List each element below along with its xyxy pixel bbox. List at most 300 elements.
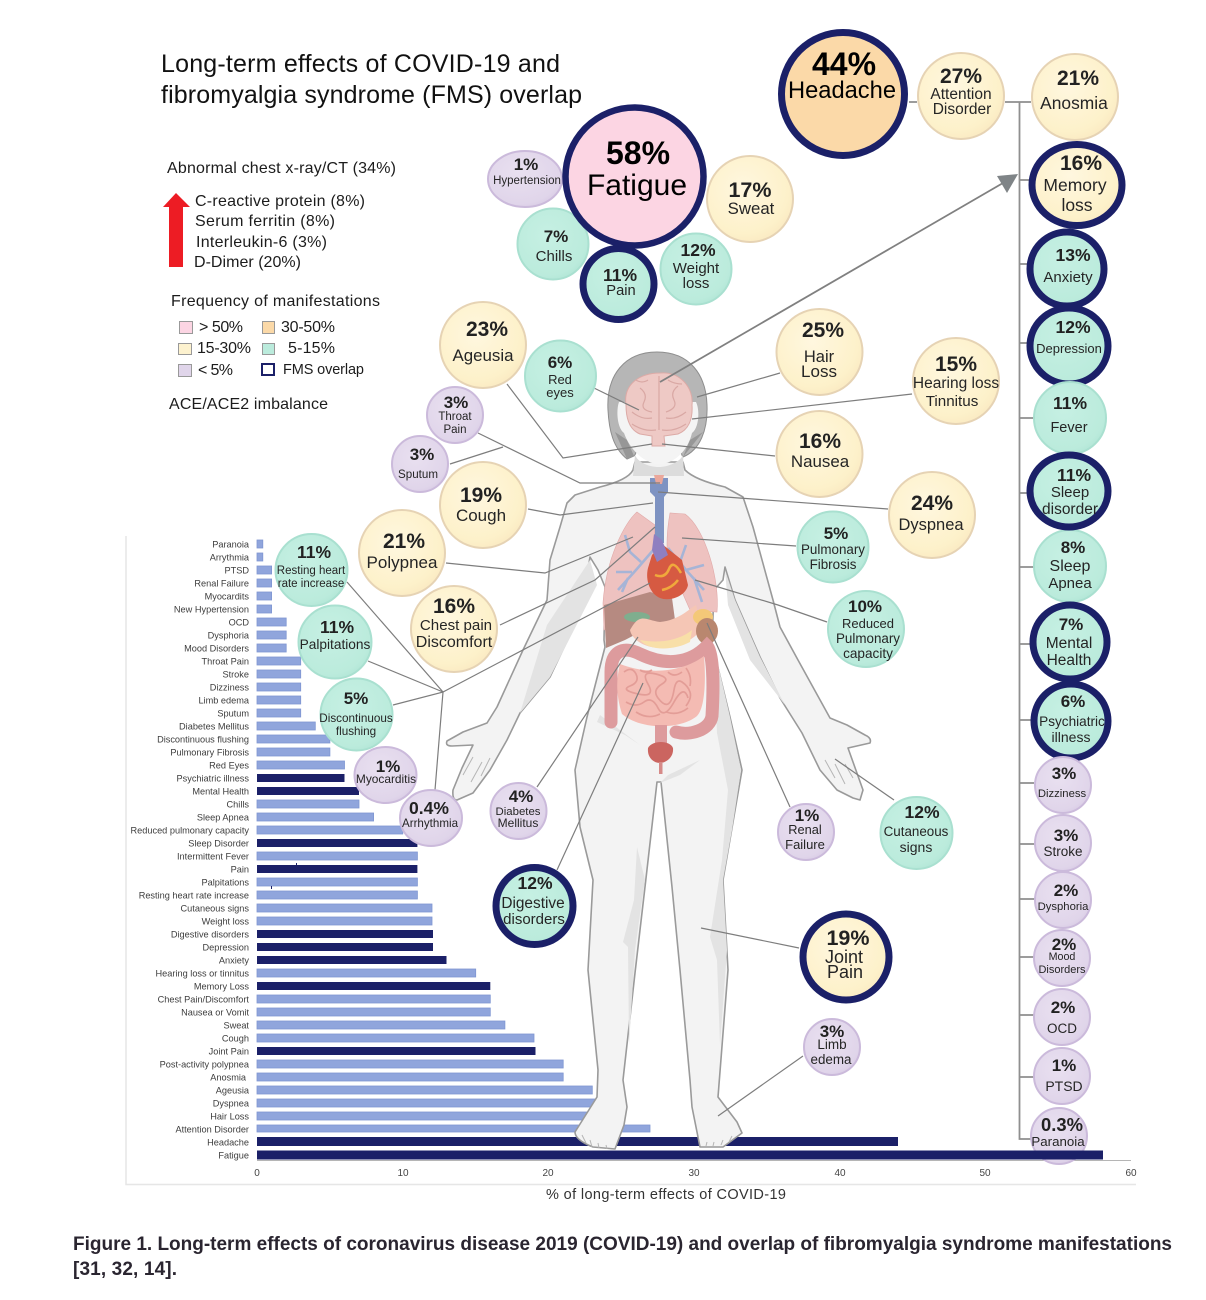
bubble: Resting heart rate increase 11%: Resting heart [277, 565, 346, 577]
bubble: Sleep Apnea 8%: Apnea [1048, 575, 1092, 592]
bubble: Diabetes Mellitus 4%: 4% [509, 787, 533, 806]
bar: Dizziness: Dizziness [210, 682, 249, 692]
bar: Joint Pain: Joint Pain [209, 1046, 249, 1056]
bubble: Renal Failure 1%: Renal [788, 822, 822, 837]
bar: Anosmia [210, 1072, 563, 1082]
bubble: PTSD 1%: PTSD [1045, 1078, 1083, 1094]
bubble: Sleep disorder 11% (FMS overlap) [1030, 455, 1108, 527]
bubble: Renal Failure 1% [778, 804, 834, 860]
bar: Anxiety: Anxiety [219, 956, 249, 966]
bar: Hearing loss or tinnitus [156, 968, 476, 978]
bubble: Throat Pain 3%: Throat [438, 411, 472, 423]
bar: Dizziness [210, 682, 301, 692]
bar: Myocardits: Myocardits [205, 592, 249, 602]
bar: Cutaneous signs [181, 904, 432, 914]
bubble: Diabetes Mellitus 4%: Diabetes [496, 806, 541, 818]
bubble: Fatigue 58% (FMS overlap) [566, 108, 704, 246]
bar: Weight loss [202, 916, 432, 926]
bubble: Ageusia 23%: Ageusia [452, 346, 514, 365]
body shading [520, 560, 785, 1045]
bar: Digestive disorders: Digestive disorders [171, 930, 249, 940]
bubble: Digestive disorders 12% (FMS overlap): 12% [517, 873, 553, 893]
x axis tick labels: 50 [979, 1168, 991, 1179]
bar: Attention Disorder: Attention Disorder [175, 1124, 249, 1134]
bladder [648, 725, 673, 774]
bar: PTSD: PTSD [224, 566, 249, 576]
bubble: Sleep Apnea 8%: 8% [1061, 538, 1085, 557]
bubble: Mood Disorders 2%: 2% [1052, 935, 1076, 954]
bubble: Hair Loss 25%: Hair [804, 348, 835, 366]
bar: Mood Disorders [184, 644, 286, 654]
bubble: Hair Loss 25%: 25% [802, 319, 844, 342]
bar: Pain: Pain [231, 864, 249, 874]
bubble: Reduced Pulmonary capacity 10%: Reduced [842, 616, 894, 631]
bar: Depression [203, 942, 433, 952]
bar: Nausea or Vomit: Nausea or Vomit [181, 1008, 249, 1018]
bar: Cough: Cough [222, 1034, 249, 1044]
bar: Hair Loss: Hair Loss [210, 1112, 249, 1122]
bubble: Anosmia 21%: Anosmia [1040, 93, 1108, 113]
bubble: Polypnea 21%: 21% [383, 530, 425, 553]
x axis tick labels: 0 [254, 1168, 260, 1179]
legend: frequency of manifestations: Frequency of manifestations [171, 293, 380, 310]
bar: Sleep Disorder: Sleep Disorder [188, 838, 249, 848]
bubble: Paranoia 0.3% [1031, 1108, 1087, 1164]
panel: lab findings [163, 160, 396, 271]
bar: Diabetes Mellitus: Diabetes Mellitus [179, 722, 249, 732]
bar: Red Eyes: Red Eyes [209, 760, 249, 770]
bubble: Limb edema 3%: Limb [817, 1037, 847, 1052]
bar: Renal Failure: Renal Failure [194, 578, 249, 588]
bubble: Mental Health 7% (FMS overlap): 7% [1059, 615, 1083, 634]
bar: Paranoia: Paranoia [212, 540, 250, 550]
legend: frequency of manifestations [171, 293, 380, 379]
bar: Chest Pain/Discomfort [158, 994, 490, 1004]
bar: Psychiatric illness: Psychiatric illness [176, 774, 249, 784]
bubble: Sleep Apnea 8% [1034, 530, 1106, 602]
bubble: Cough 19% [440, 462, 526, 548]
bubble: Digestive disorders 12% (FMS overlap) [496, 868, 573, 944]
bubble: Red eyes 6%: eyes [546, 385, 574, 400]
stomach [630, 605, 702, 648]
figure caption: [31, 32, 14]. [73, 1259, 177, 1280]
bubble: Resting heart rate increase 11%: 11% [297, 542, 331, 562]
bubble: Red eyes 6%: 6% [548, 353, 572, 372]
bubble: Psychiatric illness 6% (FMS overlap): Psychiatric [1039, 714, 1105, 729]
bubble: Sputum 3%: Sputum [398, 468, 438, 481]
bubble: Resting heart rate increase 11% [276, 534, 348, 606]
bubble: Mood Disorders 2%: Mood [1049, 951, 1075, 963]
bubble: Arrhythmia 0.4% [400, 790, 462, 846]
bubble: Anosmia 21%: 21% [1057, 67, 1099, 90]
bubble: Cough 19%: Cough [456, 506, 506, 525]
liver [604, 592, 675, 648]
bubble: Mood Disorders 2%: Disorders [1038, 964, 1086, 976]
bar: Sleep Disorder [188, 838, 417, 848]
bar: Joint Pain [209, 1046, 536, 1056]
bar: Attention Disorder [175, 1124, 650, 1134]
bubble: Anosmia 21% [1032, 54, 1118, 140]
bar: Headache [207, 1137, 898, 1148]
face [617, 402, 698, 464]
legend: frequency of manifestations: 30-50% [281, 319, 335, 336]
bubble: Attention Disorder 27% [918, 53, 1004, 139]
bubble: Mental Health 7% (FMS overlap): Health [1047, 652, 1091, 669]
bar: Throat Pain: Throat Pain [202, 656, 249, 666]
x axis tick labels: 40 [834, 1168, 846, 1179]
bar: Pain [231, 864, 417, 874]
bubble: Palpitations 11% [298, 606, 372, 678]
bar: Cough [222, 1034, 534, 1044]
legend: frequency of manifestations: 15-30% [197, 340, 251, 357]
pancreas [640, 630, 692, 648]
bubble: Psychiatric illness 6% (FMS overlap): illness [1052, 729, 1090, 745]
bar: New Hypertension: New Hypertension [174, 604, 249, 614]
bubble: Palpitations 11%: Palpitations [300, 637, 371, 652]
bubble: Joint Pain 19% (FMS overlap): Joint [825, 947, 863, 967]
x axis tick labels: 60 [1125, 1168, 1137, 1179]
bubble: Joint Pain 19% (FMS overlap): Pain [827, 962, 863, 982]
icon: red up arrow [163, 193, 190, 267]
bubble: Cutaneous signs 12%: signs [900, 839, 932, 855]
bar: Palpitations [202, 878, 417, 888]
bar: Sleep Apnea: Sleep Apnea [197, 812, 250, 822]
bubble: Cough 19%: 19% [460, 484, 502, 507]
bubble: Discontinuous flushing 5%: flushing [336, 725, 376, 738]
bubble: Myocarditis 1%: Myocarditis [356, 772, 416, 786]
bubble: Dyspnea 24%: 24% [911, 492, 953, 515]
bar: Chills [227, 800, 359, 810]
legend: frequency of manifestations: < 5% [198, 362, 233, 379]
bubble: Diabetes Mellitus 4%: Mellitus [498, 816, 538, 830]
legend: frequency of manifestations: > 50% [199, 319, 243, 336]
small intestine [617, 656, 705, 726]
bubble: Hearing loss Tinnitus 15%: Hearing loss [913, 375, 999, 392]
bar: Anosmia: Anosmia [210, 1072, 247, 1082]
bubble: Hearing loss Tinnitus 15%: 15% [935, 353, 977, 376]
bubble: Pain 11% (FMS overlap): 11% [603, 265, 637, 285]
bubble: Pulmonary Fibrosis 5%: Fibrosis [810, 557, 857, 572]
bubble: Sleep Apnea 8%: Sleep [1050, 558, 1091, 575]
bubble: Ageusia 23%: 23% [466, 318, 508, 341]
bubble: Digestive disorders 12% (FMS overlap): disorders [503, 911, 565, 928]
bubble: Polypnea 21% [359, 510, 445, 596]
bubble: Pulmonary Fibrosis 5%: 5% [824, 524, 848, 543]
bubble: OCD 2%: 2% [1051, 998, 1075, 1017]
bubble: Limb edema 3%: edema [811, 1052, 852, 1067]
bar: Palpitations: Palpitations [202, 878, 249, 888]
bar: Ageusia: Ageusia [216, 1086, 250, 1096]
bubble: Weight loss 12% [660, 234, 732, 304]
bubble: Anxiety 13% (FMS overlap): 13% [1055, 245, 1091, 265]
large intestine [611, 646, 713, 733]
connector: right column bracket [909, 102, 1035, 1139]
arrow: brain to right-hand column [660, 174, 1018, 382]
body silhouette [447, 462, 870, 1149]
bar: Depression: Depression [203, 942, 249, 952]
bubble: Chills 7%: 7% [544, 227, 568, 246]
bubble: Psychiatric illness 6% (FMS overlap) [1034, 684, 1108, 758]
bubble: Reduced Pulmonary capacity 10%: 10% [848, 597, 882, 616]
bar chart: % of long-term effects [126, 536, 1137, 1203]
bubble: Hypertension 1% [488, 151, 562, 207]
bubble: Weight loss 12%: Weight [673, 260, 720, 277]
bubble: Arrhythmia 0.4%: 0.4% [409, 798, 449, 818]
bubble: Attention Disorder 27%: Attention [930, 86, 992, 103]
bubble: Renal Failure 1%: 1% [795, 806, 819, 825]
bar: Sputum: Sputum [217, 708, 249, 718]
bubble: Diabetes Mellitus 4% [490, 783, 546, 839]
bubble: Red eyes 6%: Red [548, 372, 572, 387]
panel: lab findings: Serum ferritin (8%) [195, 213, 335, 230]
bubble: PTSD 1%: 1% [1052, 1056, 1076, 1075]
x axis title: % of long-term effects of COVID-19 [546, 1187, 786, 1203]
bubble: Renal Failure 1%: Failure [785, 837, 825, 852]
bubble: Mental Health 7% (FMS overlap) [1033, 605, 1107, 679]
bronchi [616, 535, 704, 602]
lower hair shading [615, 432, 703, 459]
bar: Limb edema: Limb edema [198, 696, 250, 706]
bubble: Chest pain Discomfort 16% [411, 586, 497, 672]
bar: Dyspnea: Dyspnea [213, 1098, 250, 1108]
title [161, 50, 582, 109]
bar: Headache: Headache [207, 1138, 249, 1148]
bubble: Memory loss 16% (FMS overlap): 16% [1060, 152, 1102, 175]
bubble: Dizziness 3%: 3% [1052, 764, 1076, 783]
bubble: Dyspnea 24% [889, 472, 975, 558]
bubble: Pain 11% (FMS overlap): Pain [606, 283, 636, 299]
bubble: Chest pain Discomfort 16%: 16% [433, 595, 475, 618]
bubble: Headache 44% (FMS overlap): 44% [812, 46, 876, 82]
bubble: Depression 12% (FMS overlap): 12% [1055, 317, 1091, 337]
bubble: Memory loss 16% (FMS overlap) [1032, 144, 1122, 226]
panel: lab findings: D-Dimer (20%) [194, 254, 301, 271]
bar: Post-activity polypnea: Post-activity polypnea [160, 1060, 250, 1070]
bubble: Stroke 3% [1035, 815, 1091, 871]
bubble: Depression 12% (FMS overlap) [1030, 308, 1108, 384]
x axis tick labels [254, 1168, 1137, 1179]
bar: Hearing loss or tinnitus: Hearing loss or tinnitus [156, 968, 249, 978]
bubble: Limb edema 3%: 3% [820, 1022, 844, 1041]
bubble: Joint Pain 19% (FMS overlap): 19% [826, 926, 870, 950]
bar: Sweat [223, 1020, 505, 1030]
leader lines from organs to bubbles [347, 373, 912, 1116]
bubble: Fatigue 58% (FMS overlap): Fatigue [587, 169, 687, 202]
bar: Memory Loss: Memory Loss [194, 982, 249, 992]
bar: Dysphoria [208, 630, 286, 640]
bubble: Stroke 3%: 3% [1054, 826, 1078, 845]
bar: Reduced pulmonary capacity [131, 826, 403, 836]
panel: lab findings: Interleukin-6 (3%) [196, 234, 327, 251]
bubble: Palpitations 11%: 11% [320, 617, 354, 637]
bar: Weight loss: Weight loss [202, 916, 249, 926]
bubble: Weight loss 12%: 12% [680, 240, 716, 260]
bubble: Cutaneous signs 12%: Cutaneous [884, 824, 949, 839]
bubble: Mood Disorders 2% [1034, 930, 1090, 986]
bubble: Sweat 17% [707, 156, 793, 242]
bar: OCD: OCD [229, 618, 249, 628]
bubble: Cutaneous signs 12% [880, 797, 952, 869]
bar: Stroke [222, 670, 301, 680]
bubble: PTSD 1% [1034, 1048, 1090, 1104]
bar: Post-activity polypnea [160, 1060, 563, 1070]
bubble: Myocarditis 1% [354, 747, 416, 803]
figure caption: Figure 1. Long-term effects of coronavirus disease 2019 (COVID-19) and overlap of fibromyalgia syndrome manifestations [73, 1234, 1172, 1255]
trachea [650, 475, 668, 543]
bubble: Fever 11%: 11% [1053, 393, 1087, 413]
bar: Reduced pulmonary capacity: Reduced pulmonary capacity [131, 826, 249, 836]
bar: Chest Pain/Discomfort: Chest Pain/Discomfort [158, 994, 249, 1004]
bubble: Cutaneous signs 12%: 12% [904, 802, 940, 822]
bubble: Ageusia 23% [440, 302, 526, 388]
bubble: Chills 7% [518, 208, 588, 280]
bar: Cutaneous signs: Cutaneous signs [181, 904, 249, 914]
panel: lab findings: Abnormal chest x-ray/CT (34%) [167, 160, 396, 177]
bar: Fatigue [218, 1150, 1103, 1160]
bubble: Attention Disorder 27%: Disorder [933, 101, 991, 118]
title: fibromyalgia syndrome (FMS) overlap [161, 81, 582, 109]
bubble: Dysphoria 2% [1035, 872, 1091, 928]
bubble: OCD 2%: OCD [1047, 1021, 1077, 1036]
bar: Psychiatric illness [176, 774, 344, 784]
bubble: Fatigue 58% (FMS overlap): 58% [606, 135, 670, 171]
bar: Stroke: Stroke [222, 670, 249, 680]
bubble: Dysphoria 2%: Dysphoria [1038, 901, 1089, 913]
bubble: Sputum 3% [392, 436, 448, 492]
bar: Resting heart rate increase: Resting heart rate increase [139, 890, 249, 900]
bar: Pulmonary Fibrosis [170, 748, 330, 758]
bubble: Polypnea 21%: Polypnea [367, 553, 438, 572]
bubble: Dyspnea 24%: Dyspnea [898, 516, 964, 534]
bubble: Psychiatric illness 6% (FMS overlap): 6% [1061, 692, 1085, 711]
bar: Intermittent Fever [177, 852, 417, 862]
panel: lab findings: C-reactive protein (8%) [195, 193, 365, 210]
bar: Mental Health [192, 786, 359, 796]
bubble: Throat Pain 3%: 3% [444, 393, 468, 412]
bar: OCD [229, 618, 286, 628]
bubble: Hypertension 1%: 1% [514, 155, 538, 174]
bubble: Discontinuous flushing 5%: Discontinuous [319, 712, 393, 725]
figure caption [73, 1234, 1172, 1280]
bubble: Weight loss 12%: loss [683, 275, 709, 292]
bar: Sweat: Sweat [223, 1020, 249, 1030]
bubble: Reduced Pulmonary capacity 10%: Pulmonary [836, 631, 900, 646]
bubble: Reduced Pulmonary capacity 10% [828, 591, 904, 667]
bar: Fatigue: Fatigue [218, 1150, 249, 1160]
bubble: Pulmonary Fibrosis 5%: Pulmonary [801, 542, 865, 557]
bubble: Pain 11% (FMS overlap) [583, 248, 654, 320]
heart [647, 534, 688, 599]
lungs [603, 512, 717, 630]
bar: Memory Loss [194, 982, 490, 992]
bubble: Dizziness 3% [1035, 757, 1091, 813]
bubble: Stroke 3%: Stroke [1043, 844, 1083, 859]
bar: Myocardits [205, 592, 272, 602]
bar: Discontinuous flushing [157, 734, 330, 744]
bubble: Pulmonary Fibrosis 5% [798, 512, 868, 582]
bubble: Resting heart rate increase 11%: rate increase [278, 578, 344, 590]
x axis tick labels: 30 [688, 1168, 700, 1179]
bubble: Chills 7%: Chills [536, 248, 572, 265]
bubble: Nausea 16%: 16% [799, 430, 841, 453]
bubble: Throat Pain 3% [427, 387, 483, 443]
bubble: Myocarditis 1%: 1% [376, 757, 400, 776]
bubble: Fever 11% [1034, 382, 1106, 454]
bubble: Joint Pain 19% (FMS overlap) [803, 914, 889, 1000]
bar: Sleep Apnea [197, 812, 374, 822]
bar: Mental Health: Mental Health [192, 786, 249, 796]
bubble: Sweat 17%: 17% [728, 178, 772, 202]
bubble: Arrhythmia 0.4%: Arrhythmia [402, 817, 459, 830]
bubble: Headache 44% (FMS overlap) [782, 32, 904, 156]
x axis tick labels: 20 [542, 1168, 554, 1179]
legend: frequency of manifestations: 5-15% [288, 340, 335, 357]
bar: Limb edema [198, 696, 301, 706]
bar: Hair Loss [210, 1112, 622, 1122]
bubble: Dizziness 3%: Dizziness [1038, 788, 1087, 800]
bubble: Discontinuous flushing 5%: 5% [344, 689, 368, 708]
bubble: Discontinuous flushing 5% [319, 678, 393, 750]
brain [626, 373, 692, 446]
bubble: Sleep disorder 11% (FMS overlap): Sleep [1051, 484, 1089, 501]
bubble: OCD 2% [1034, 989, 1090, 1045]
anatomy: human body [447, 352, 870, 1149]
bubble: Sleep disorder 11% (FMS overlap): 11% [1057, 465, 1091, 485]
bubble: Throat Pain 3%: Pain [443, 424, 467, 436]
bar: Sputum [217, 708, 301, 718]
bar: Red Eyes [209, 760, 344, 770]
x axis tick labels: 10 [397, 1168, 409, 1179]
bubble: Hearing loss Tinnitus 15%: Tinnitus [926, 393, 979, 410]
bar: PTSD [224, 566, 272, 576]
bar: Digestive disorders [171, 930, 433, 940]
bubble: Digestive disorders 12% (FMS overlap): Digestive [501, 895, 565, 912]
bubble: Nausea 16% [776, 411, 862, 497]
bar: Resting heart rate increase [139, 890, 417, 900]
bubble: Nausea 16%: Nausea [791, 452, 850, 471]
hair [608, 352, 707, 459]
bubble: Sleep disorder 11% (FMS overlap): disorder [1042, 501, 1098, 518]
bubble: Attention Disorder 27%: 27% [940, 65, 982, 88]
bubble: Mental Health 7% (FMS overlap): Mental [1046, 635, 1092, 652]
bubble: Paranoia 0.3%: Paranoia [1031, 1134, 1085, 1149]
bubble: Depression 12% (FMS overlap): Depression [1036, 341, 1102, 356]
bubble: Anxiety 13% (FMS overlap): Anxiety [1043, 269, 1093, 286]
bar: Intermittent Fever: Intermittent Fever [177, 852, 249, 862]
bar: Dyspnea [213, 1098, 607, 1108]
gallbladder [624, 612, 650, 622]
bubble: Memory loss 16% (FMS overlap): Memory [1043, 175, 1107, 195]
bubble: Hearing loss Tinnitus 15% [913, 338, 999, 424]
bubble: Paranoia 0.3%: 0.3% [1041, 1114, 1083, 1135]
bubble: Sweat 17%: Sweat [728, 199, 775, 218]
bubble: Hair Loss 25%: Loss [801, 362, 837, 381]
bar: Throat Pain [202, 656, 301, 666]
bubble: Hypertension 1%: Hypertension [493, 175, 561, 187]
bubble: Red eyes 6% [525, 340, 596, 412]
neck shade [633, 455, 684, 476]
bar: Diabetes Mellitus [179, 722, 315, 732]
bar: Anxiety [219, 956, 446, 966]
bubble: Fever 11%: Fever [1050, 420, 1088, 436]
title: Long-term effects of COVID-19 and [161, 50, 560, 78]
fingers and toes [463, 757, 853, 1149]
bubble: Headache 44% (FMS overlap): Headache [788, 78, 896, 104]
bar: Pulmonary Fibrosis: Pulmonary Fibrosis [170, 748, 249, 758]
bar: Dysphoria: Dysphoria [208, 630, 250, 640]
bar: Discontinuous flushing: Discontinuous flushing [157, 734, 249, 744]
bubble: Chest pain Discomfort 16%: Chest pain [420, 617, 492, 634]
